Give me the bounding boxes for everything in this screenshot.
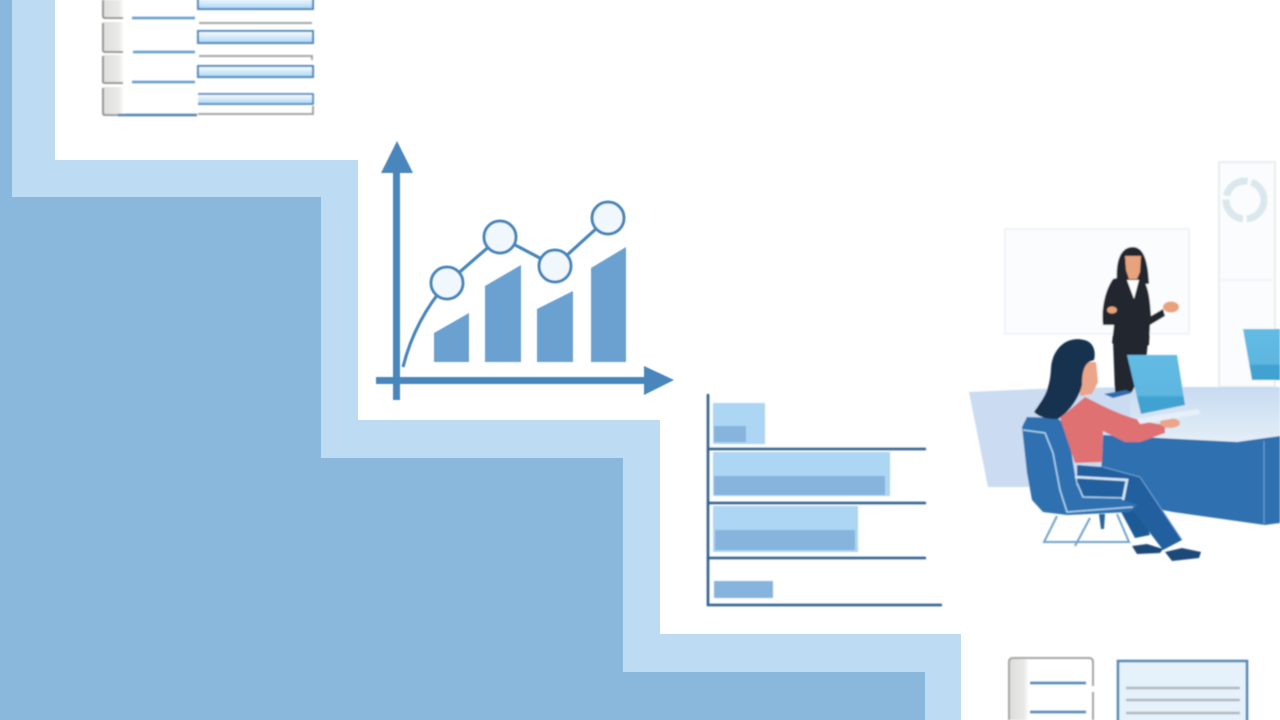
bars light <box>713 403 890 552</box>
presenter jacket <box>1102 276 1165 349</box>
staircase: light band <box>0 0 961 720</box>
chair legs <box>1044 514 1129 546</box>
laptop screen <box>1127 355 1185 414</box>
text panel <box>1118 661 1247 720</box>
presenter hands <box>1107 302 1179 314</box>
bar chart axes <box>708 394 942 605</box>
chart bars <box>434 247 626 362</box>
chart trend line <box>403 218 608 367</box>
table icon: bottom right <box>1009 658 1247 720</box>
presenter shirt <box>1127 280 1139 299</box>
chair armrest <box>1075 477 1127 500</box>
woman front leg <box>1077 465 1182 550</box>
table corner highlight <box>1263 441 1265 524</box>
presenter hair <box>1117 247 1149 284</box>
chair post <box>1099 514 1105 529</box>
table row tabs <box>103 0 124 114</box>
presenter face <box>1125 256 1141 279</box>
laptop base <box>1137 409 1201 424</box>
table cells <box>198 0 313 104</box>
faded wall panel with ring <box>1219 162 1275 387</box>
center laptop <box>1127 355 1201 424</box>
chart axes <box>376 141 674 400</box>
table icon: top left <box>103 0 313 115</box>
presenter legs <box>1113 340 1148 392</box>
seated woman face <box>1080 362 1098 396</box>
office scene <box>969 162 1280 561</box>
horizontal bar chart <box>708 394 942 605</box>
faded whiteboard <box>1005 229 1189 334</box>
table grey rules <box>198 23 313 114</box>
bars dark <box>714 426 885 598</box>
seated woman hair <box>1034 339 1095 419</box>
table front <box>1100 435 1280 525</box>
table row lines <box>118 18 197 115</box>
leg highlight <box>1103 467 1182 540</box>
seated woman hand <box>1160 418 1180 428</box>
meeting table top left <box>969 387 1140 487</box>
chart: rising bars with trend line <box>376 141 674 400</box>
chart trend markers <box>431 202 624 299</box>
chair body <box>1022 417 1138 515</box>
meeting table top right <box>1130 387 1280 442</box>
presenter <box>1102 247 1179 398</box>
staircase: dark fill <box>0 0 925 720</box>
shoes <box>1132 544 1201 561</box>
right laptop <box>1243 329 1280 380</box>
small table <box>1009 658 1093 720</box>
table row brackets <box>103 0 123 115</box>
seated woman torso and arm <box>1060 397 1165 463</box>
woman rear leg <box>1120 503 1150 538</box>
chair piping <box>1023 430 1133 512</box>
presenter shoe <box>1104 390 1132 398</box>
